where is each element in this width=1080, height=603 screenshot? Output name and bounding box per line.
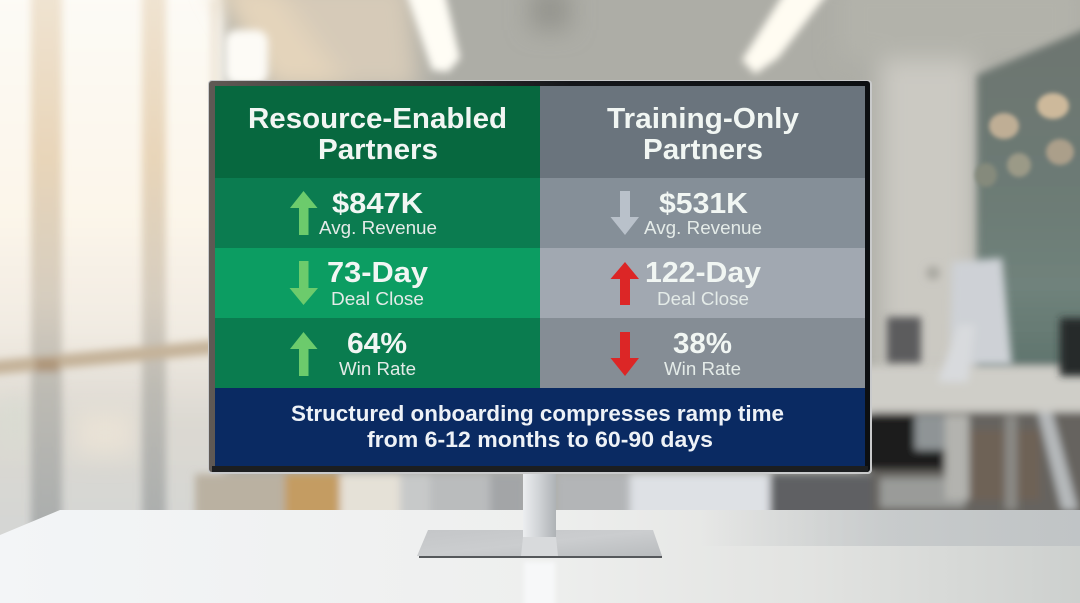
header: resource-enabled: Resource-Enabled [248, 103, 507, 135]
column: resource-enabled partners [215, 86, 540, 388]
window area [0, 0, 225, 570]
metric: win rate [540, 318, 865, 388]
icon: up arrow [610, 262, 639, 305]
banner: key takeaway: from 6-12 months to 60-90 days [367, 427, 713, 452]
icon: down arrow [610, 332, 639, 376]
stand neck [523, 474, 556, 537]
metric: deal close: 73-Day [327, 257, 428, 289]
header: training-only: Partners [643, 134, 763, 166]
banner: key takeaway [215, 388, 865, 466]
metric: win rate: Win Rate [339, 359, 416, 379]
bokeh lights [975, 93, 1074, 187]
icon: down arrow [610, 191, 639, 235]
desk [860, 366, 1080, 412]
metric: win rate: 38% [673, 328, 732, 360]
metric: deal close [540, 248, 865, 318]
column: training-only partners [540, 86, 865, 388]
background monitor and items [887, 258, 1080, 382]
icon: up arrow [290, 191, 318, 235]
metric: deal close: 122-Day [645, 257, 761, 289]
under desk [872, 405, 1080, 525]
table surface [0, 510, 1080, 603]
header: resource-enabled [215, 86, 540, 178]
metric: win rate: Win Rate [664, 359, 741, 379]
screen [215, 86, 865, 466]
metric: deal close: Deal Close [331, 289, 424, 309]
metric: average revenue [215, 178, 540, 248]
monitor bezel [208, 80, 872, 474]
metric: average revenue [540, 178, 865, 248]
glass room [977, 25, 1080, 375]
metric: win rate [215, 318, 540, 388]
monitor stand [417, 474, 662, 558]
header: training-only: Training-Only [607, 103, 799, 135]
banner: key takeaway: Structured onboarding compresses ramp time [291, 401, 784, 426]
header: training-only [540, 86, 865, 178]
metric: average revenue: $847K [332, 188, 423, 220]
window frame [0, 0, 216, 550]
ceiling lights [405, 0, 830, 74]
icon: down arrow [290, 261, 318, 305]
header: resource-enabled: Partners [318, 134, 438, 166]
metric: deal close: Deal Close [657, 289, 749, 309]
metric: win rate: 64% [347, 328, 407, 360]
metric: average revenue: $531K [659, 188, 748, 220]
metric: deal close [215, 248, 540, 318]
metric: average revenue: Avg. Revenue [319, 218, 437, 238]
icon: up arrow [290, 332, 318, 376]
monitor [208, 80, 872, 474]
stand base [417, 530, 662, 556]
metric: average revenue: Avg. Revenue [644, 218, 762, 238]
